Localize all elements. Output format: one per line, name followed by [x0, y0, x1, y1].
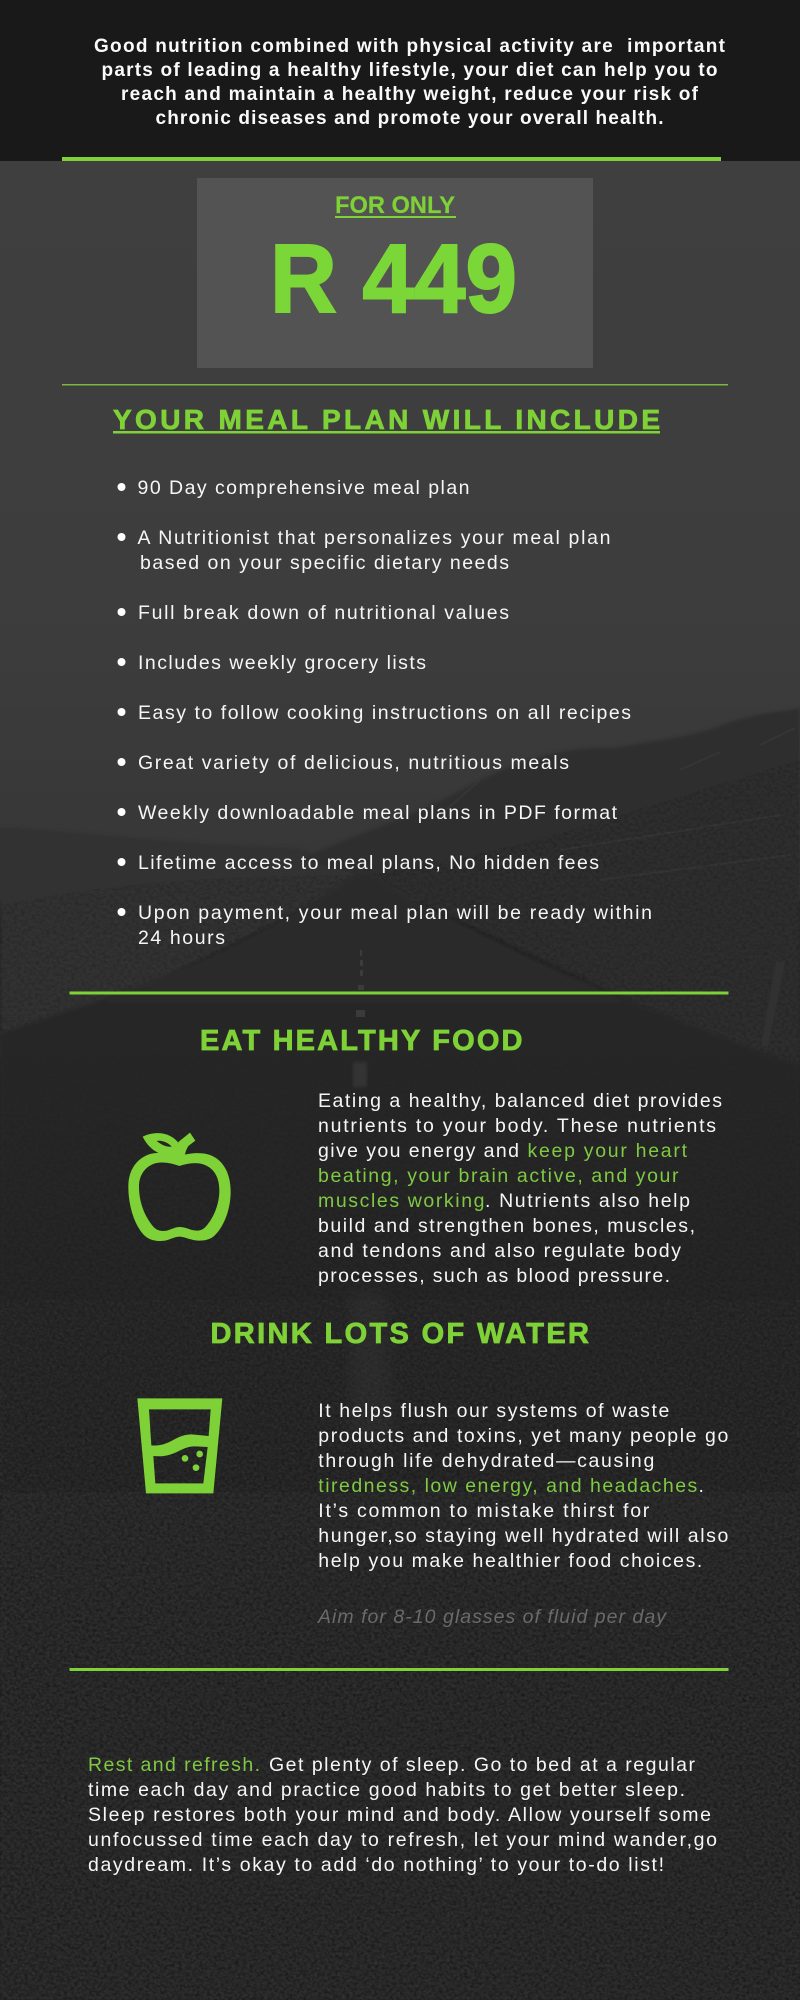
text block: eat healthy food: . Nutrients also help	[485, 1190, 690, 1212]
divider: top green line	[62, 157, 721, 161]
icon: glass of water	[137, 1398, 222, 1493]
intro paragraph: reach and maintain a healthy weight, reduce your risk of	[121, 84, 699, 105]
text block: rest and refresh: unfocussed time each day to refresh, let your mind wander,go	[88, 1829, 717, 1851]
text block: eat healthy food: and tendons and also regulate body	[318, 1240, 681, 1262]
text block: eat healthy food: muscles working	[318, 1190, 484, 1212]
meal plan list	[118, 477, 652, 949]
intro paragraph: parts of leading a healthy lifestyle, your diet can help you to	[102, 60, 718, 81]
text block: eat healthy food: beating, your brain active, and your	[318, 1165, 679, 1187]
list item: pdf: Weekly downloadable meal plans in PDF format	[138, 802, 618, 824]
heading: your meal plan: YOUR MEAL PLAN WILL INCLUDE	[113, 404, 660, 435]
text block: eat healthy food: keep your heart	[528, 1140, 688, 1162]
intro paragraph: chronic diseases and promote your overall health.	[156, 108, 664, 129]
heading: drink lots of water: DRINK LOTS OF WATER	[210, 1318, 589, 1350]
list item: upon payment: 24 hours	[138, 927, 225, 949]
list item: cooking: Easy to follow cooking instructions on all recipes	[138, 702, 631, 724]
text block: drink water: help you make healthier food choices.	[318, 1550, 702, 1572]
text block: rest and refresh: Sleep restores both your mind and body. Allow yourself some	[88, 1804, 711, 1826]
top intro band	[0, 0, 800, 161]
text block: drink water: products and toxins, yet many people go	[318, 1425, 728, 1447]
list item: lifetime: Lifetime access to meal plans, No hidden fees	[138, 852, 599, 874]
text block: rest and refresh: daydream. It’s okay to add ‘do nothing’ to your to-do list!	[88, 1854, 664, 1876]
list item: nutritionist: A Nutritionist that personalizes your meal plan	[138, 527, 610, 549]
divider: green line	[70, 1668, 728, 1671]
list item: 90 day: 90 Day comprehensive meal plan	[138, 477, 470, 499]
price: R 449	[270, 224, 517, 333]
text block: eat healthy food	[318, 1090, 722, 1287]
intro paragraph: Good nutrition combined with physical activity are important	[94, 36, 726, 57]
heading: eat healthy food: EAT HEALTHY FOOD	[200, 1025, 522, 1057]
text block: eat healthy food: processes, such as blood pressure.	[318, 1265, 670, 1287]
list item: nutritionist	[118, 527, 610, 574]
list item: nutritional values: Full break down of nutritional values	[138, 602, 509, 624]
text block: rest and refresh	[88, 1754, 717, 1876]
for only label: FOR ONLY	[335, 192, 455, 219]
text block: eat healthy food: give you energy and	[318, 1140, 519, 1162]
text block: rest and refresh: Get plenty of sleep. Go to bed at a regular	[269, 1754, 696, 1776]
text block: drink water	[318, 1400, 728, 1572]
price panel	[197, 178, 593, 368]
divider: green line	[70, 992, 728, 994]
text block: drink water: hunger,so staying well hydrated will also	[318, 1525, 728, 1547]
list item: upon payment	[118, 902, 652, 949]
text block: drink water: It helps flush our systems of waste	[318, 1400, 669, 1422]
text block: drink water: tiredness, low energy, and headaches	[318, 1475, 698, 1497]
text block: drink water: It’s common to mistake thirst for	[318, 1500, 650, 1522]
text block: drink water: through life dehydrated—causing	[318, 1450, 654, 1472]
text block: drink water: .	[698, 1475, 704, 1497]
divider: thin green line	[62, 384, 728, 386]
text block: eat healthy food: build and strengthen bones, muscles,	[318, 1215, 695, 1237]
list item: nutritionist: based on your specific dietary needs	[140, 552, 509, 574]
text block: rest and refresh: Rest and refresh.	[88, 1754, 260, 1776]
list item: upon payment: Upon payment, your meal plan will be ready within	[138, 902, 652, 924]
icon: apple	[128, 1133, 231, 1241]
list item: grocery lists: Includes weekly grocery lists	[138, 652, 426, 674]
list item: variety: Great variety of delicious, nutritious meals	[138, 752, 569, 774]
text block: eat healthy food: nutrients to your body. These nutrients	[318, 1115, 716, 1137]
text block: rest and refresh: time each day and practice good habits to get better sleep.	[88, 1779, 685, 1801]
text block: eat healthy food: Eating a healthy, balanced diet provides	[318, 1090, 722, 1112]
note: glasses per day: Aim for 8-10 glasses of fluid per day	[317, 1606, 667, 1628]
intro paragraph	[94, 36, 726, 129]
